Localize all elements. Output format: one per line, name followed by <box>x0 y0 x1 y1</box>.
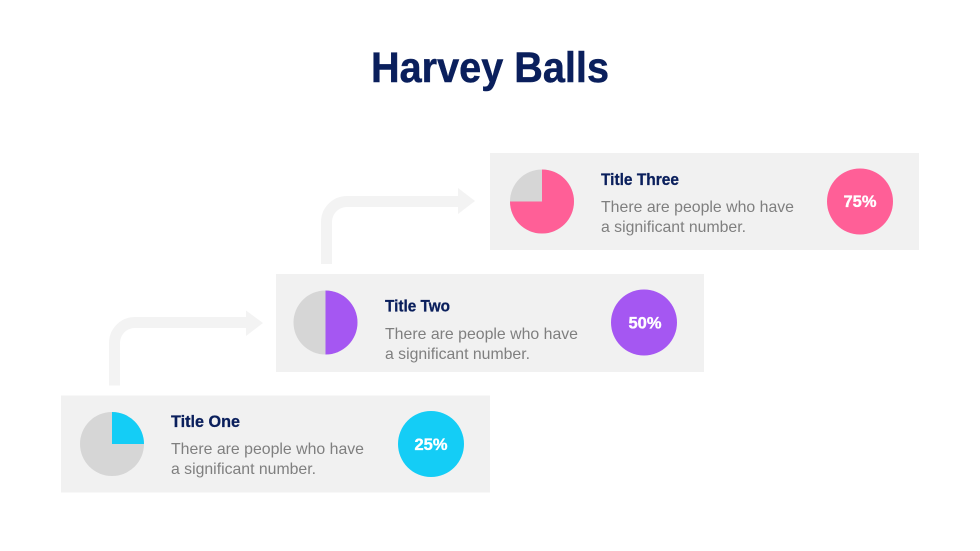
icon: harvey ball 50% <box>294 290 358 354</box>
panel: title one <box>61 396 490 492</box>
panel: title three <box>490 153 919 250</box>
text: description three: There are people who have <box>601 199 794 216</box>
icon: harvey ball 25% <box>80 412 144 476</box>
badge: 25%: 25% <box>414 435 448 454</box>
title: Harvey Balls <box>371 44 609 92</box>
arrow: step two to step three <box>326 188 475 264</box>
heading: title three: Title Three <box>601 170 679 189</box>
text: description one <box>171 441 364 478</box>
text: description two: a significant number. <box>385 346 530 363</box>
text: description three: a significant number. <box>601 219 746 236</box>
text: description one: There are people who have <box>171 441 364 458</box>
arrow: step one to step two <box>114 310 263 386</box>
heading: title one: Title One <box>171 412 240 431</box>
badge: 75% <box>827 168 893 234</box>
panel: title two <box>276 274 704 372</box>
badge: 25% <box>398 411 464 477</box>
text: description three <box>601 199 794 236</box>
badge: 50% <box>611 290 677 356</box>
badge: 50%: 50% <box>628 314 662 332</box>
icon: harvey ball 75% <box>510 170 574 234</box>
badge: 75%: 75% <box>844 192 876 211</box>
text: description one: a significant number. <box>171 461 316 478</box>
text: description two: There are people who have <box>385 326 578 343</box>
text: description two <box>385 326 578 363</box>
heading: title two: Title Two <box>385 296 450 316</box>
